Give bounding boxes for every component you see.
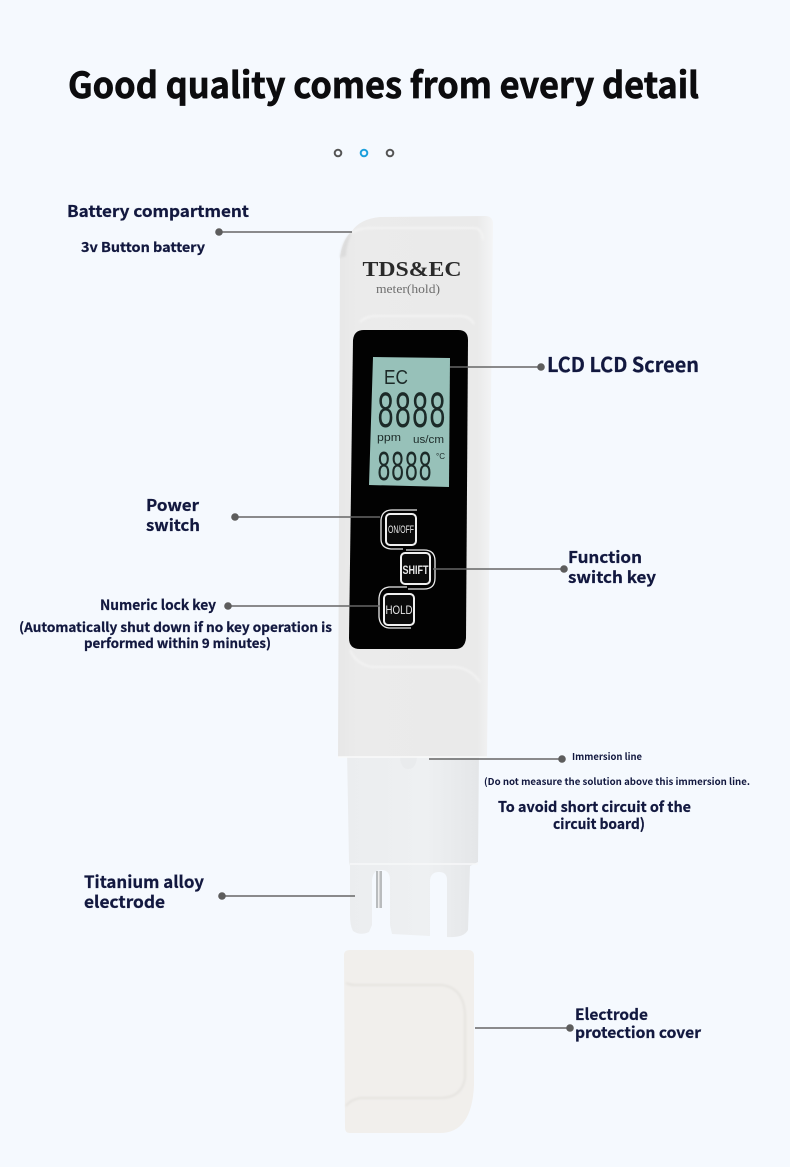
LCD screen: 8888 — [377, 384, 446, 443]
callout: electrode protection cover: Electrode — [575, 1003, 648, 1025]
brand text: meter(hold) — [376, 282, 440, 296]
product: meter body — [338, 216, 493, 937]
LCD screen — [369, 357, 450, 494]
LCD screen: ppm — [377, 432, 401, 444]
callout: power switch — [146, 492, 380, 536]
body shading top-left — [340, 232, 352, 258]
LCD screen: EC — [384, 367, 408, 389]
callout: immersion line: Immersion line — [572, 749, 642, 763]
callout: immersion line: (Do not measure the solution above this immersion line. — [484, 774, 750, 788]
callout: function switch key: Function — [568, 544, 642, 568]
button: hold: HOLD — [386, 603, 413, 617]
callout: numeric lock key: performed within 9 minutes) — [84, 633, 271, 652]
body bottom edge — [338, 756, 487, 758]
LCD screen: °C — [436, 452, 445, 461]
callout: immersion line — [429, 749, 750, 834]
callout: battery compartment: Battery compartment — [67, 198, 249, 222]
meter upper body — [338, 216, 493, 757]
callout: numeric lock key: Numeric lock key — [100, 595, 216, 615]
button: hold — [379, 587, 414, 628]
prong divider — [350, 863, 478, 865]
button: shift: SHIFT — [402, 563, 429, 577]
black panel — [349, 330, 468, 649]
callout: battery compartment — [67, 198, 352, 256]
callout: power switch: switch — [146, 512, 200, 536]
callout: LCD screen — [450, 349, 699, 378]
callout: immersion line: To avoid short circuit of the — [498, 796, 691, 817]
callout: function switch key — [433, 544, 656, 588]
brand text — [362, 257, 462, 296]
decorative dots — [335, 150, 393, 156]
meter lower section with electrode prongs — [347, 750, 479, 937]
callout: numeric lock key: (Automatically shut down if no key operation is — [19, 617, 332, 636]
callout: LCD screen: LCD LCD Screen — [547, 349, 699, 378]
callout: titanium alloy electrode — [84, 869, 355, 913]
button: on/off: ON/OFF — [388, 524, 414, 536]
LCD screen: 8888 — [377, 446, 432, 494]
callout: function switch key: switch key — [568, 564, 656, 588]
title: Good quality comes from every detail — [68, 58, 699, 109]
button: on/off — [381, 510, 417, 549]
immersion notch — [400, 757, 417, 769]
callout: battery compartment: 3v Button battery — [81, 236, 205, 256]
LCD screen: us/cm — [413, 434, 444, 446]
callout: titanium alloy electrode: Titanium alloy — [84, 869, 205, 893]
callout: numeric lock key — [19, 595, 380, 652]
protective cap — [344, 950, 474, 1133]
callout: titanium alloy electrode: electrode — [84, 889, 165, 913]
callout: electrode protection cover — [475, 1003, 701, 1043]
metal electrode pin — [376, 871, 382, 908]
callout: immersion line: circuit board) — [553, 813, 645, 834]
button: shift — [401, 550, 435, 589]
callout: electrode protection cover: protection cover — [575, 1021, 701, 1043]
body ridges — [350, 228, 483, 682]
brand text: TDS&EC — [362, 257, 462, 281]
callout: power switch: Power — [146, 492, 199, 516]
